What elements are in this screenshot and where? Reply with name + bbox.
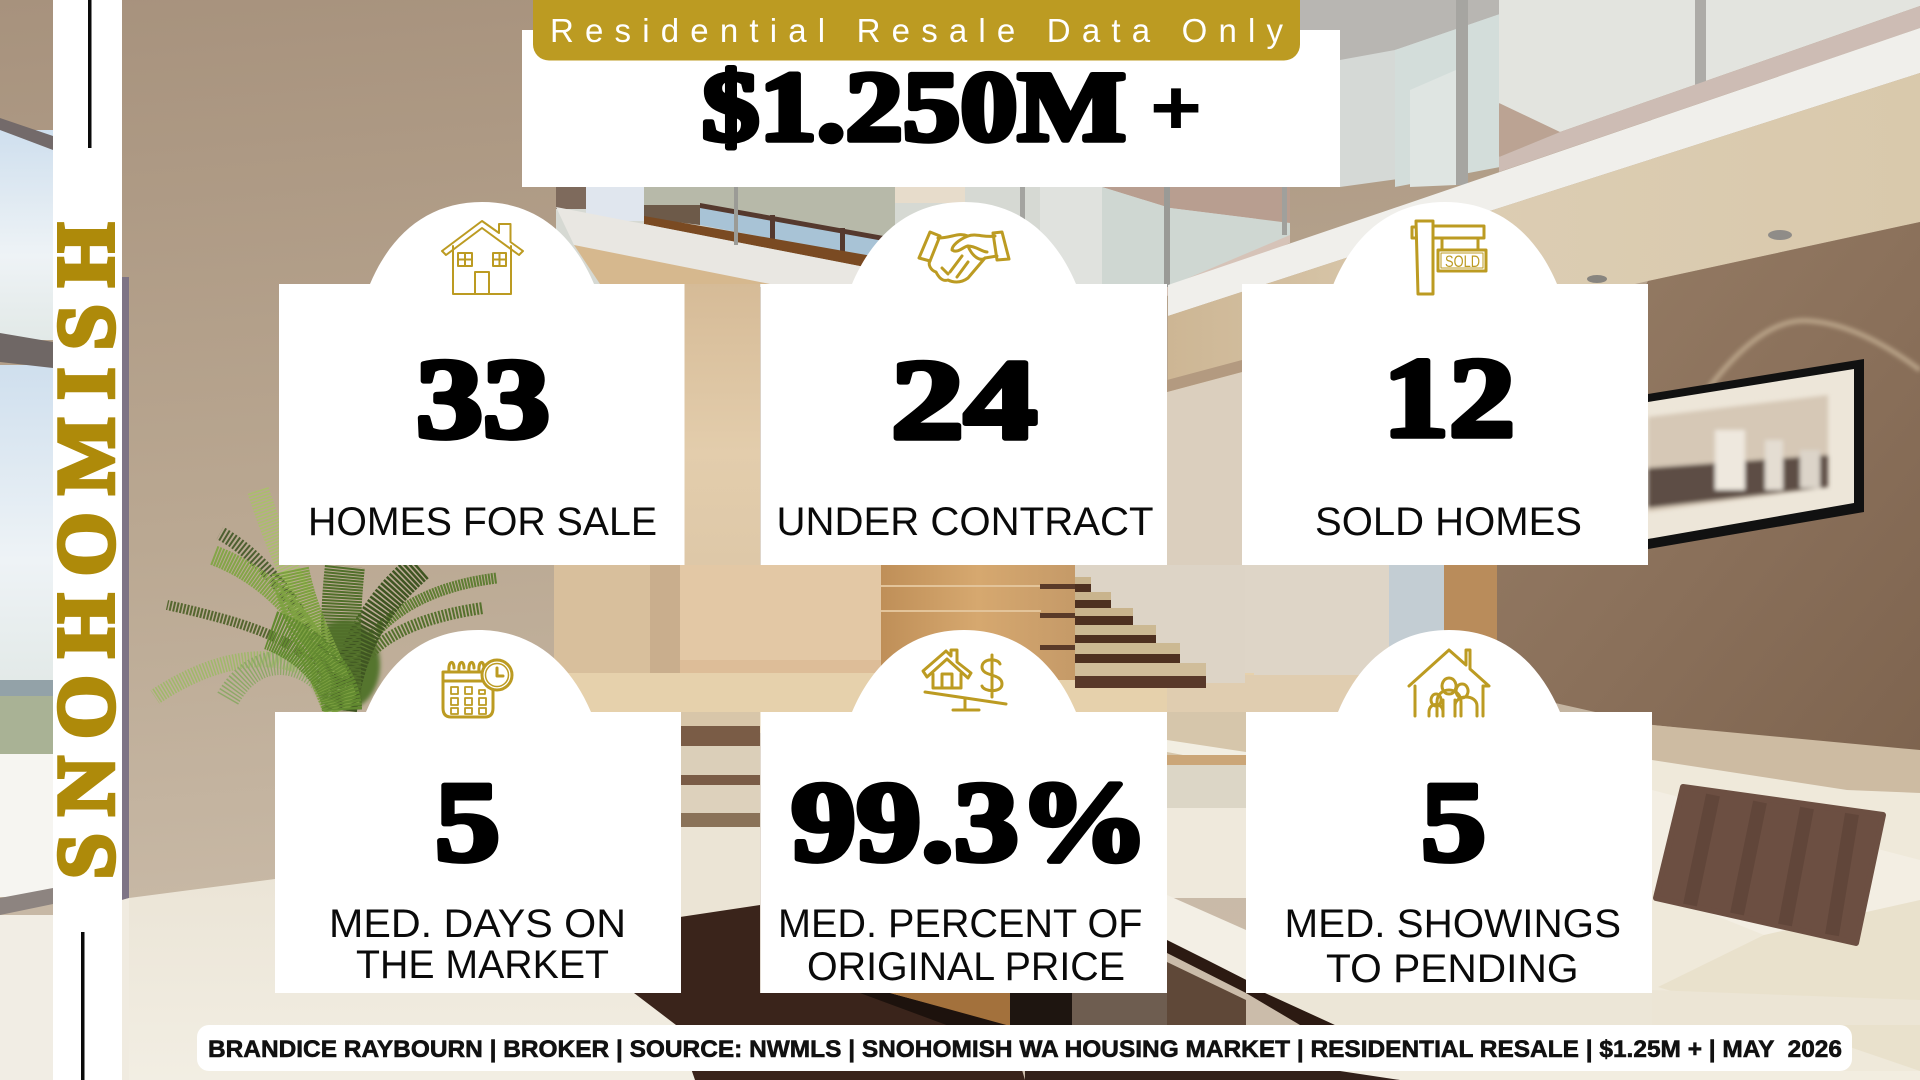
- header badge text: Residential Resale Data Only: [550, 12, 1284, 49]
- card: median showings to pending: [1246, 630, 1652, 993]
- icon: family in house: [1409, 650, 1489, 716]
- label second line: THE MARKET: [356, 943, 609, 987]
- icon: calendar: [443, 660, 512, 717]
- icon: house: [442, 221, 523, 294]
- left floor and steps: [122, 712, 760, 1080]
- value: 5: [435, 758, 500, 885]
- plant: [155, 490, 497, 710]
- card: median percent of original price: [760, 630, 1167, 993]
- upper balcony glass at right: [1168, 0, 1920, 316]
- value: 12: [1383, 334, 1515, 461]
- card: median days on market: [275, 630, 681, 993]
- label: HOMES FOR SALE: [308, 500, 657, 544]
- wood panel and stairs: [881, 565, 1245, 688]
- value: 99.3%: [791, 758, 1149, 885]
- dark rug: [634, 905, 1450, 1080]
- sold sign word: SOLD: [1445, 252, 1480, 271]
- centre walls and floor: [554, 284, 1497, 733]
- window at left: [0, 118, 53, 1080]
- label second line: TO PENDING: [1326, 947, 1578, 991]
- icon: handshake: [919, 232, 1009, 282]
- cushion: [1656, 787, 1883, 943]
- label: MED. PERCENT OF: [778, 902, 1142, 946]
- footer source bar: [197, 1025, 1852, 1071]
- framed picture: [1648, 359, 1864, 549]
- icon: sold sign: [1412, 221, 1486, 294]
- wall edge trim: [122, 277, 129, 900]
- price tier: $1.250M: [702, 51, 1126, 162]
- icon: house and dollar on a balance: [923, 650, 1006, 710]
- label: SOLD HOMES: [1315, 500, 1582, 544]
- header panel: [522, 0, 1340, 187]
- ceiling and brown wall at right: [1167, 73, 1920, 753]
- sofa: [1167, 712, 1920, 1080]
- plus sign: +: [1150, 63, 1202, 151]
- value: 33: [416, 335, 550, 462]
- label: MED. SHOWINGS: [1284, 902, 1621, 946]
- label: MED. DAYS ON: [329, 902, 626, 946]
- card: sold homes: [1242, 202, 1648, 565]
- footer text: BRANDICE RAYBOURN | BROKER | SOURCE: NWMLS | SNOHOMISH WA HOUSING MARKET | RESIDENTIAL RESALE | $1.25M + | MAY 2026: [208, 1036, 1842, 1063]
- value: 5: [1421, 758, 1486, 885]
- mezzanine glass and window: [556, 187, 1290, 296]
- card: under contract: [760, 202, 1167, 565]
- label: UNDER CONTRACT: [776, 500, 1154, 544]
- vertical location title: SNOHOMISH: [40, 223, 131, 879]
- card: homes for sale: [279, 202, 684, 565]
- side band: Snohomish: [40, 0, 131, 1080]
- header badge: [533, 0, 1300, 60]
- label second line: ORIGINAL PRICE: [807, 945, 1125, 989]
- value: 24: [891, 336, 1037, 463]
